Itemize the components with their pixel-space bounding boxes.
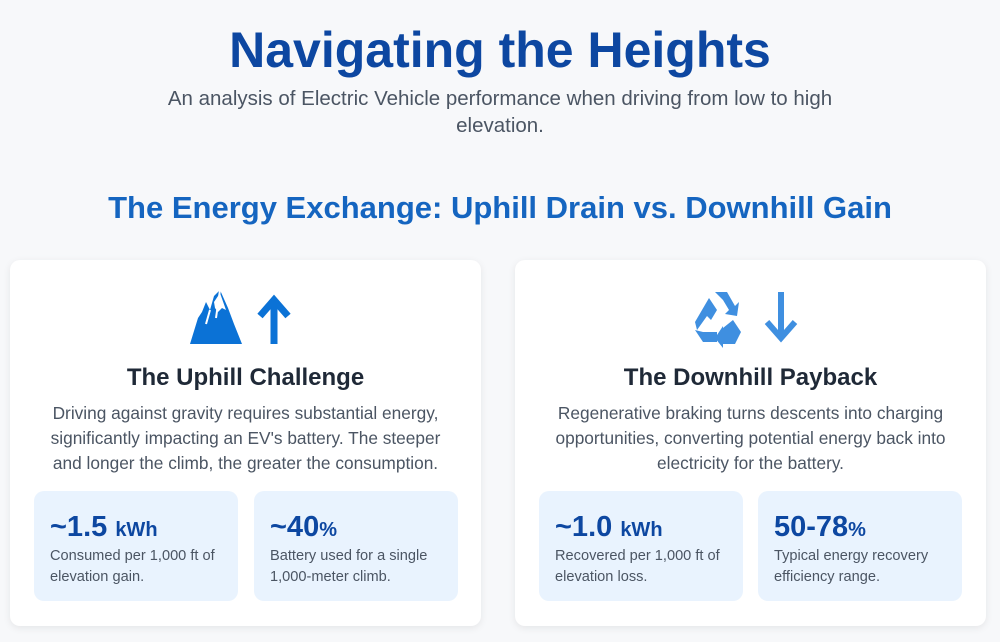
- subtitle: An analysis of Electric Vehicle performance when driving from low to high elevation.: [168, 87, 832, 137]
- panel: uphill: [10, 260, 481, 626]
- card title: The Uphill Challenge: [127, 364, 364, 391]
- card body: Regenerative braking turns descents into charging opportunities, converting potential energy back into electricity for the battery.: [555, 403, 946, 473]
- panel: downhill: [515, 260, 986, 626]
- stat: kwh consumed: [34, 491, 238, 601]
- title: Navigating the Heights: [229, 22, 771, 78]
- stat: kwh recovered: [539, 491, 743, 601]
- stat: battery used: Battery used for a single 1,000-meter climb.: [270, 548, 427, 585]
- stat: kwh consumed: Consumed per 1,000 ft of elevation gain.: [50, 548, 215, 585]
- stat: battery used: ~40%: [270, 511, 337, 543]
- stat: kwh recovered: ~1.0 kWh: [555, 511, 663, 543]
- stat: recovery efficiency: 50-78%: [774, 511, 866, 543]
- stat: kwh consumed: ~1.5 kWh: [50, 511, 158, 543]
- card title: The Downhill Payback: [624, 364, 877, 391]
- stat: recovery efficiency: Typical energy recovery efficiency range.: [774, 548, 928, 585]
- stat: battery used: [254, 491, 458, 601]
- stat: kwh recovered: Recovered per 1,000 ft of elevation loss.: [555, 548, 720, 585]
- section heading: The Energy Exchange: Uphill Drain vs. Downhill Gain: [108, 190, 892, 225]
- stat: recovery efficiency: [758, 491, 962, 601]
- icon: recycle and down arrow: [695, 292, 798, 348]
- card body: Driving against gravity requires substantial energy, significantly impacting an EV's battery. The steeper and longer the climb, the greater the consumption.: [51, 403, 440, 473]
- icon: mountain and up arrow: [190, 291, 291, 344]
